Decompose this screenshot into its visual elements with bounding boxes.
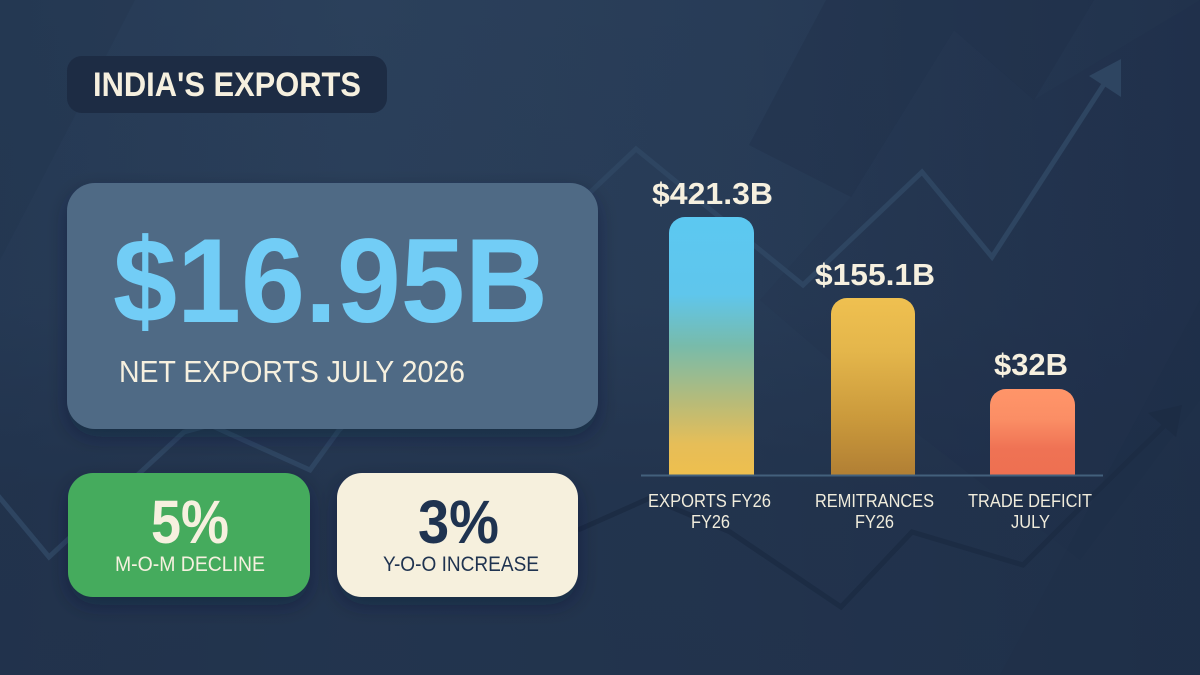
bar: trade deficit	[968, 347, 1092, 532]
bar: exports: EXPORTS FY26	[648, 490, 771, 511]
bar: remittances: $155.1B	[815, 257, 935, 292]
background trend line with arrow (lower)	[578, 405, 1182, 607]
panel: net exports headline	[67, 183, 598, 429]
bar: exports: FY26	[691, 511, 730, 532]
card: month on month decline	[68, 473, 310, 597]
background trend line with arrow (upper)	[0, 59, 1121, 557]
increase value: 3%	[418, 488, 499, 556]
bar: trade deficit: $32B	[994, 347, 1068, 382]
decline value: 5%	[151, 488, 229, 556]
bar: exports: $421.3B	[652, 176, 773, 211]
increase label: Y-O-O INCREASE	[383, 553, 539, 576]
bar: remittances	[815, 257, 935, 532]
card: year on year increase	[337, 473, 578, 597]
headline caption: NET EXPORTS JULY 2026	[119, 354, 465, 389]
bar: trade deficit: JULY	[1011, 511, 1050, 532]
bar: remittances: FY26	[855, 511, 894, 532]
headline figure: $16.95B	[113, 214, 548, 348]
bar: exports	[648, 176, 773, 532]
decline label: M-O-M DECLINE	[115, 553, 265, 576]
bar: trade deficit: TRADE DEFICIT	[968, 490, 1092, 511]
bar chart	[641, 176, 1103, 532]
bar: remittances: REMITRANCES	[815, 490, 934, 511]
chart baseline	[641, 474, 1103, 476]
title badge	[67, 56, 387, 113]
title: INDIA'S EXPORTS	[93, 66, 361, 104]
